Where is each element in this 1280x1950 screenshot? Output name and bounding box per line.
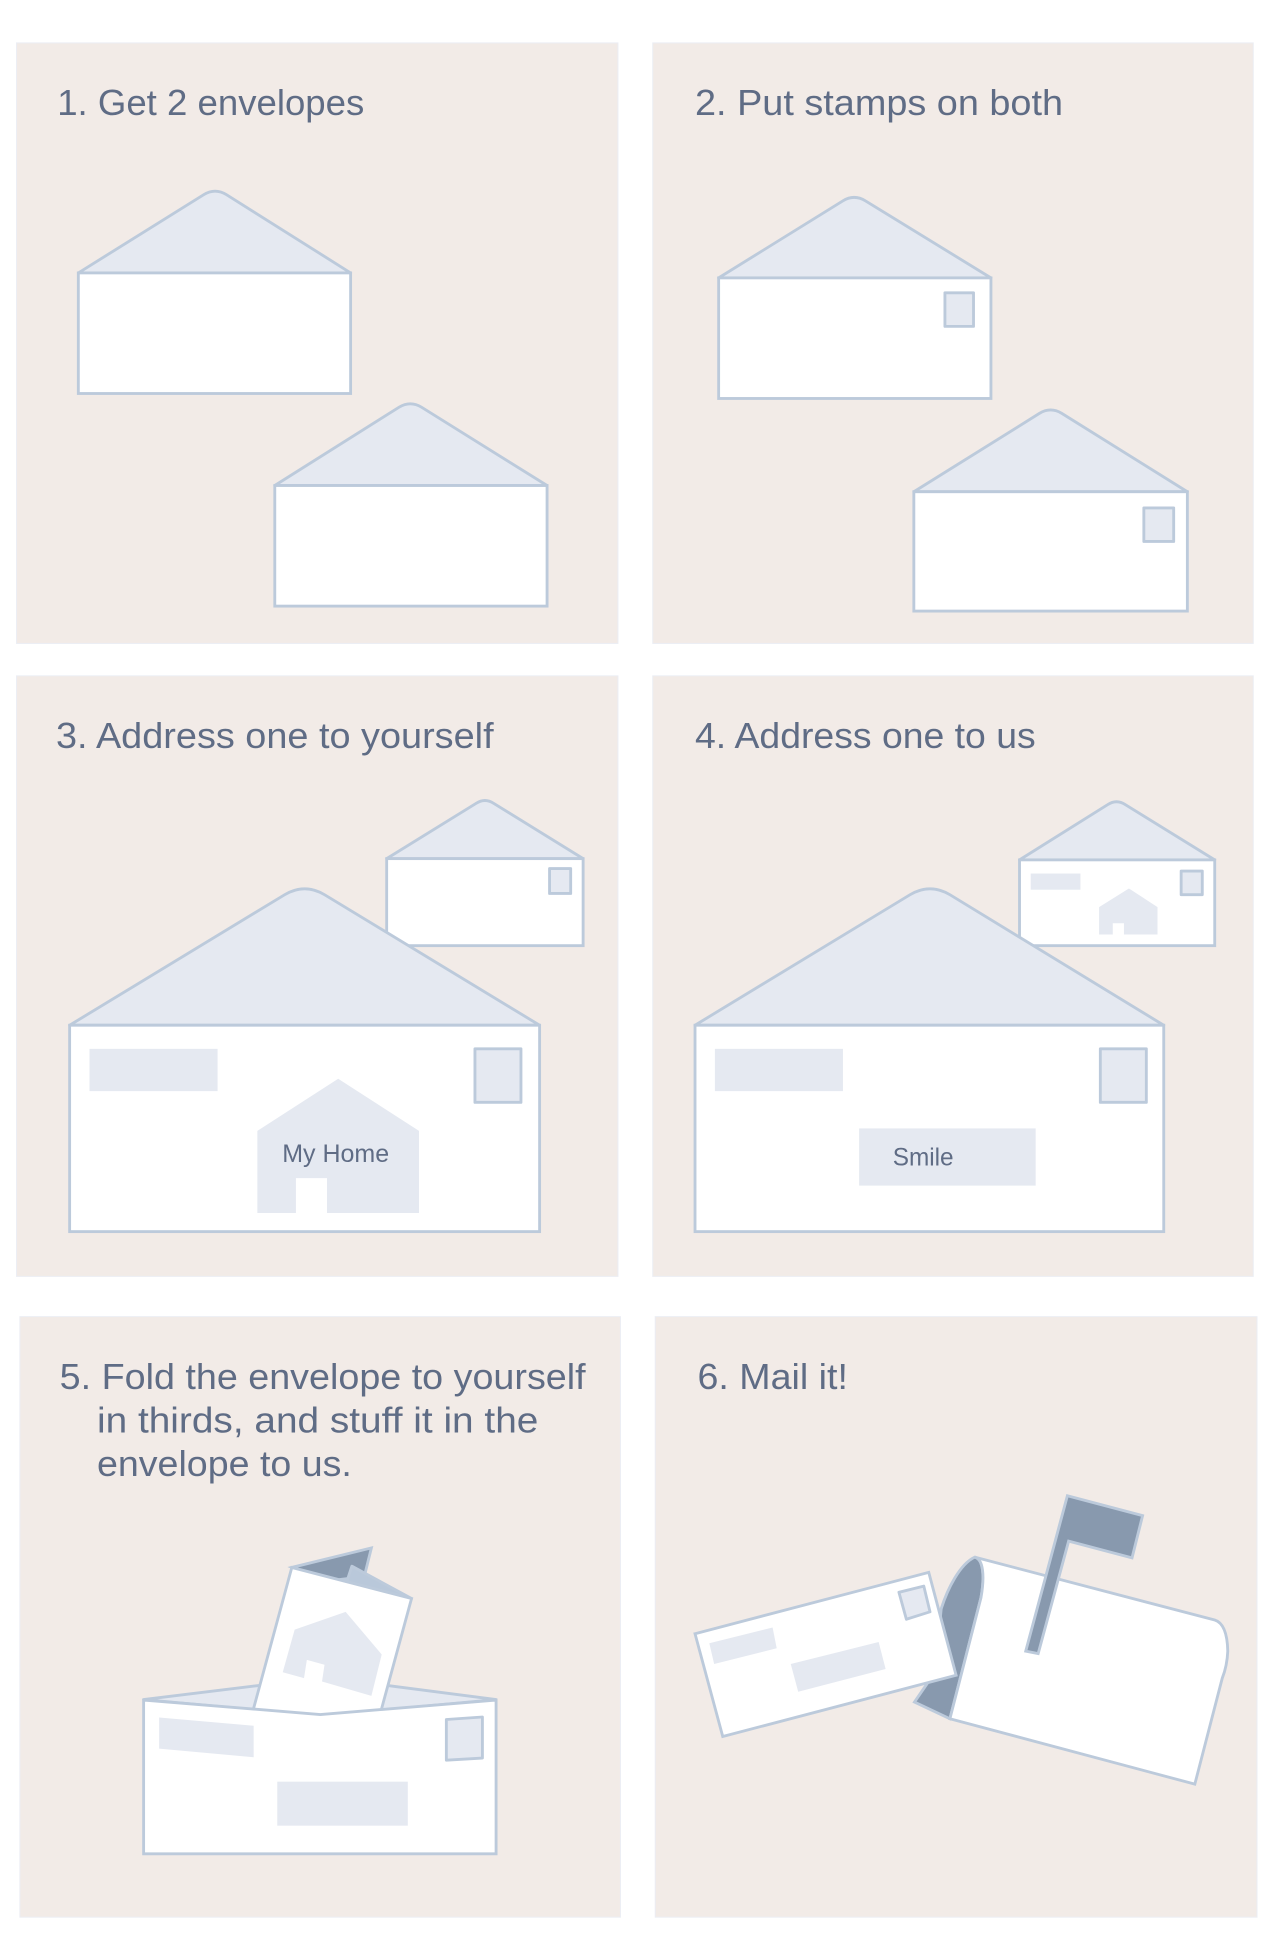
- icon: small envelope behind: [387, 801, 583, 946]
- heading: step 3: 3. Address one to yourself: [56, 715, 495, 756]
- icon: folded letter with house: [250, 1548, 412, 1722]
- heading: step 6: 6. Mail it!: [698, 1356, 848, 1397]
- heading: step 5: envelope to us.: [97, 1443, 352, 1484]
- icon: envelope back flap: [144, 1686, 496, 1716]
- icon: small envelope with house: [1020, 802, 1215, 946]
- heading: step 5: 5. Fold the envelope to yourself: [60, 1356, 587, 1397]
- icon: large envelope addressed to us: [695, 889, 1164, 1232]
- heading: step 4: 4. Address one to us: [695, 715, 1036, 756]
- icon: house with address label: My Home: [282, 1140, 389, 1168]
- panel: step 4: [653, 676, 1253, 1276]
- heading: step 5: in thirds, and stuff it in the: [97, 1399, 538, 1440]
- icon: stamped envelope upper left: [719, 197, 991, 398]
- icon: envelope lower right: [275, 404, 547, 606]
- panel: step 2: [653, 43, 1253, 643]
- heading: step 5: [60, 1356, 587, 1484]
- address label: Smile: [859, 1128, 1036, 1186]
- icon: mailbox flag: [1026, 1496, 1143, 1654]
- icon: mailbox opening: [914, 1557, 983, 1719]
- icon: large envelope addressed to yourself: [70, 889, 540, 1232]
- panel: step 5: [20, 1317, 620, 1917]
- icon: envelope upper left: [78, 191, 351, 394]
- icon: stamped envelope lower right: [914, 410, 1187, 611]
- panel: step 3: [17, 676, 618, 1276]
- address label: Smile: Smile: [893, 1144, 954, 1172]
- panel: step 6: [655, 1317, 1257, 1917]
- icon: envelope entering mailbox: [695, 1572, 956, 1737]
- icon: mailbox body: [950, 1557, 1228, 1784]
- heading: step 1: 1. Get 2 envelopes: [57, 82, 364, 123]
- heading: step 2: 2. Put stamps on both: [695, 82, 1063, 123]
- icon: house with address label: [257, 1079, 419, 1213]
- panel: step 1: [17, 43, 618, 643]
- icon: open envelope front: [144, 1700, 496, 1854]
